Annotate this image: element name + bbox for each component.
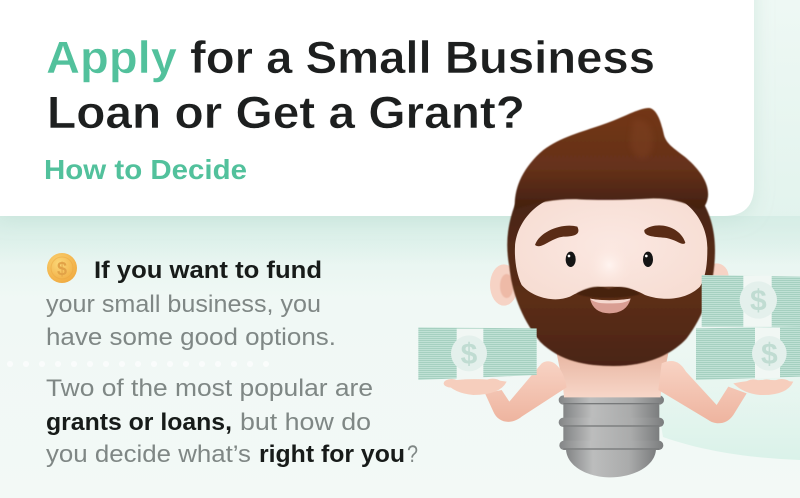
face [515,192,707,299]
intro text: have some good options. [46,324,336,351]
money stack: left: $ [461,338,478,371]
illustration: lightbulb character with money [418,108,800,477]
left eyebrow [535,226,578,246]
right hand [733,379,793,395]
hair [515,108,708,209]
money stack: right bottom: $ [761,338,778,371]
body text [46,375,418,468]
nose [584,240,634,290]
right ear [705,263,729,290]
body text: but how do [240,409,371,436]
dotted divider [7,361,269,367]
left ear [490,264,518,306]
money stack: right top: $ [750,285,767,318]
left eye [566,252,576,267]
intro text: If you want to fund [94,257,322,284]
right arm [658,361,747,423]
subtitle: How to Decide [44,154,247,185]
moustache [577,287,640,298]
money stack: right bottom [696,327,800,380]
body text: ? [407,441,418,468]
title: for a Small Business [190,32,655,83]
title [46,32,655,138]
beard [507,200,715,366]
body text: you decide what’s [46,441,251,468]
title: Loan or Get a Grant? [47,87,525,138]
right eye [643,252,653,267]
title: Apply [46,32,177,83]
money stack: left [418,327,537,380]
left arm [485,361,567,422]
neck [557,353,668,397]
money stack: right top [702,275,800,327]
light bulb screw base [559,395,664,477]
body text: grants or loans, [46,409,232,436]
intro text [46,257,336,351]
right eyebrow [644,225,685,244]
panel: title card [0,0,754,216]
intro text: your small business, you [46,291,321,318]
icon: gold coin: $ [57,259,67,279]
body text: Two of the most popular are [46,375,373,402]
body text: right for you [259,441,405,468]
left hand [444,379,507,395]
icon: gold coin [47,253,77,283]
mouth [590,299,631,313]
